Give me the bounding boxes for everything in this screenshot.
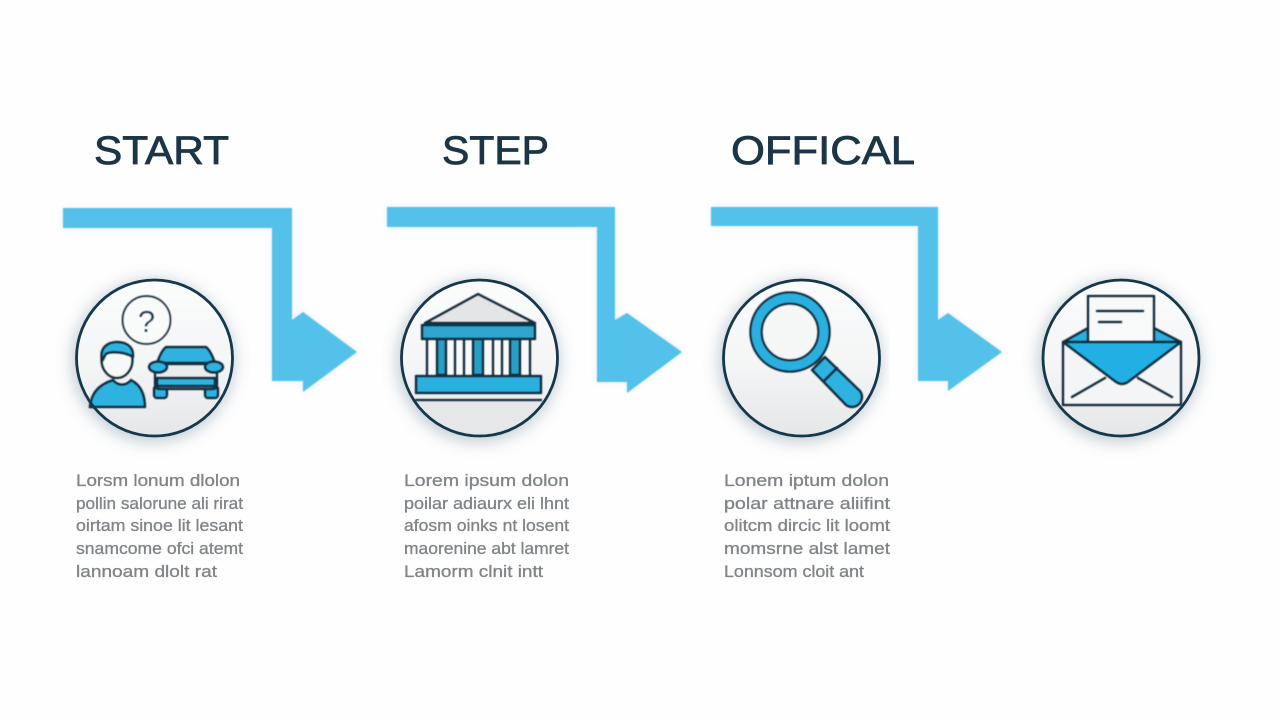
heading: OFFICAL: OFFICAL [731, 129, 915, 173]
text block: start description: Lorsm lonum dlolon [76, 471, 240, 490]
arrow: official to final [711, 207, 1002, 391]
text block: step description: maorenine abt lamret [404, 539, 569, 558]
text block: official description: olitcm dircic lit loomt [724, 516, 890, 535]
text block: official description: Lonem iptum dolon [724, 471, 889, 490]
arrow: step to official [387, 207, 682, 393]
text block: step description: afosm oinks nt losent [404, 516, 569, 535]
heading: STEP: STEP [442, 129, 549, 173]
icon: magnifying glass [719, 280, 881, 442]
icon: person, car and question mark [72, 280, 234, 442]
text block: start description: pollin salorune ali rirat [76, 494, 243, 513]
text block: step description: poilar adiaurx eli lhnt [404, 494, 569, 513]
text block: step description [404, 471, 569, 581]
text block: start description: oirtam sinoe lit lesant [76, 516, 243, 535]
text block: official description: polar attnare aliifint [724, 494, 890, 513]
text block: official description: momsrne alst lamet [724, 539, 890, 558]
text block: official description [724, 471, 890, 581]
heading: START: START [94, 129, 229, 173]
text block: step description: Lorem ipsum dolon [404, 471, 569, 490]
arrow: start to step [63, 208, 357, 392]
text block: start description: snamcome ofci atemt [76, 539, 243, 558]
text block: official description: Lonnsom cloit ant [724, 562, 864, 581]
text block: step description: Lamorm clnit intt [404, 562, 543, 581]
ring: disc outlines [76, 280, 1199, 436]
icon: person, car and question mark: ? [138, 304, 155, 339]
icon: bank building [397, 280, 559, 442]
text block: start description [76, 471, 243, 581]
text block: start description: lannoam dlolt rat [76, 562, 217, 581]
icon: open envelope with letter [1038, 280, 1200, 442]
